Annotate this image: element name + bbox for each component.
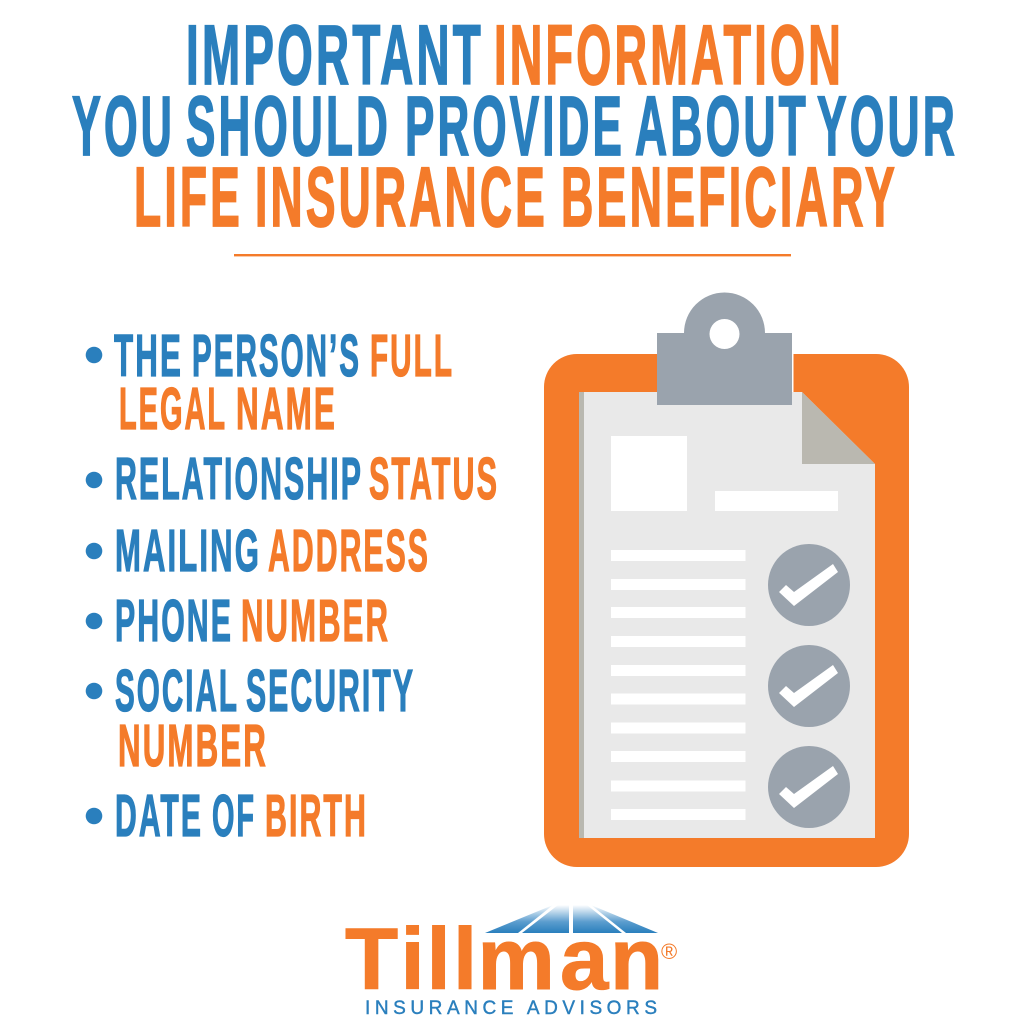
clip xyxy=(657,292,794,405)
item: social security number: SECURITY xyxy=(246,658,415,724)
item: full legal name xyxy=(86,323,454,442)
title underline xyxy=(234,254,791,256)
title line 2: YOU xyxy=(72,79,175,173)
logo: Tillman Insurance Advisors xyxy=(345,905,677,1019)
icon: clipboard xyxy=(544,292,909,867)
clipboard board xyxy=(544,354,909,867)
item: mailing address: ADDRESS xyxy=(268,518,430,584)
name placeholder xyxy=(715,491,838,511)
check circle 2 xyxy=(768,645,850,727)
registered mark: ® xyxy=(661,939,677,964)
item: mailing address: MAILING xyxy=(115,518,261,584)
checklist xyxy=(86,323,499,849)
item: full legal name: PERSON’S xyxy=(192,323,361,389)
logo tagline: INSURANCE ADVISORS xyxy=(365,998,657,1019)
check circle 3 xyxy=(768,746,850,828)
item: social security number: SOCIAL xyxy=(115,658,239,724)
paper sheet xyxy=(579,392,875,838)
logo roof xyxy=(485,905,658,933)
title line 3: LIFE xyxy=(134,150,243,244)
item: full legal name: LEGAL xyxy=(119,376,227,442)
item: full legal name: NAME xyxy=(236,376,337,442)
title line 2: SHOULD xyxy=(186,79,391,173)
photo placeholder xyxy=(611,436,687,511)
title line 1: IMPORTANT xyxy=(186,8,484,102)
logo wordmark: Tillman xyxy=(345,911,663,1008)
item: relationship status: RELATIONSHIP xyxy=(115,446,363,512)
title xyxy=(72,8,958,244)
item: date of birth xyxy=(86,783,368,849)
check circle 1 xyxy=(768,544,850,626)
item: full legal name: FULL xyxy=(370,323,454,389)
item: phone number: PHONE xyxy=(115,588,233,654)
item: date of birth: DATE xyxy=(115,783,203,849)
title line 2: ABOUT xyxy=(635,79,809,173)
title line 2: PROVIDE xyxy=(405,79,625,173)
item: relationship status: STATUS xyxy=(369,446,499,512)
text lines xyxy=(611,550,746,820)
item: full legal name: THE xyxy=(114,323,183,389)
item: social security number xyxy=(86,658,415,779)
item: date of birth: OF xyxy=(212,783,256,849)
title line 2 xyxy=(72,79,958,173)
item: social security number: NUMBER xyxy=(118,713,268,779)
item: date of birth: BIRTH xyxy=(265,783,368,849)
title line 3: INSURANCE xyxy=(255,150,548,244)
item: phone number: NUMBER xyxy=(241,588,390,654)
